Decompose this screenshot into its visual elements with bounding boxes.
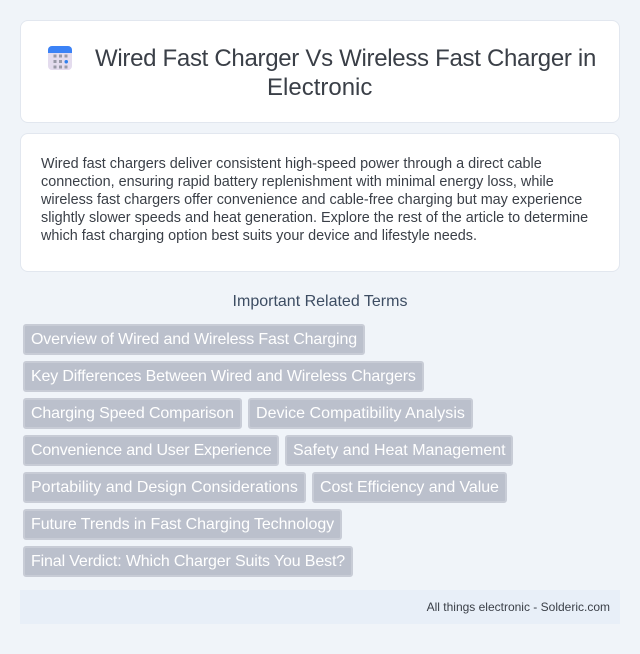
- title: Electronic: [267, 74, 372, 101]
- tag: Safety and Heat Management: [293, 442, 506, 459]
- tag: [248, 398, 473, 429]
- tag list: [23, 324, 513, 577]
- intro card: [20, 133, 620, 272]
- intro text: wireless fast chargers offer convenience and cable-free charging but may experience: [41, 192, 582, 208]
- tag: [23, 361, 424, 392]
- tag: [312, 472, 507, 503]
- intro text: slightly slower speeds and heat generation. Explore the rest of the article to determine: [41, 210, 588, 226]
- title card: [20, 20, 620, 123]
- tag: Future Trends in Fast Charging Technology: [31, 516, 334, 533]
- tag: Final Verdict: Which Charger Suits You Best?: [31, 553, 345, 570]
- tag: Device Compatibility Analysis: [256, 405, 465, 422]
- tag: [23, 398, 242, 429]
- tag: [23, 546, 353, 577]
- tag: Overview of Wired and Wireless Fast Charging: [31, 331, 357, 348]
- tag: Cost Efficiency and Value: [320, 479, 499, 496]
- tag: [23, 324, 365, 355]
- title: Wired Fast Charger Vs Wireless Fast Charger in: [95, 45, 596, 72]
- tag: Charging Speed Comparison: [31, 405, 234, 422]
- icon: calendar: [48, 46, 72, 70]
- tag: [23, 472, 306, 503]
- intro text: Wired fast chargers deliver consistent high-speed power through a direct cable: [41, 156, 542, 172]
- footer text: All things electronic - Solderic.com: [427, 600, 610, 614]
- tag: [285, 435, 513, 466]
- tag: [23, 509, 342, 540]
- intro text: which fast charging option best suits your device and lifestyle needs.: [41, 228, 477, 244]
- tag: [23, 435, 279, 466]
- tag: Convenience and User Experience: [31, 442, 271, 459]
- footer bar: [20, 590, 620, 624]
- intro text: connection, ensuring rapid battery replenishment with minimal energy loss, while: [41, 174, 554, 190]
- intro text: [41, 156, 588, 244]
- related terms heading: Important Related Terms: [233, 293, 407, 310]
- tag: Portability and Design Considerations: [31, 479, 298, 496]
- title: [95, 45, 596, 101]
- tag: Key Differences Between Wired and Wireless Chargers: [31, 368, 416, 385]
